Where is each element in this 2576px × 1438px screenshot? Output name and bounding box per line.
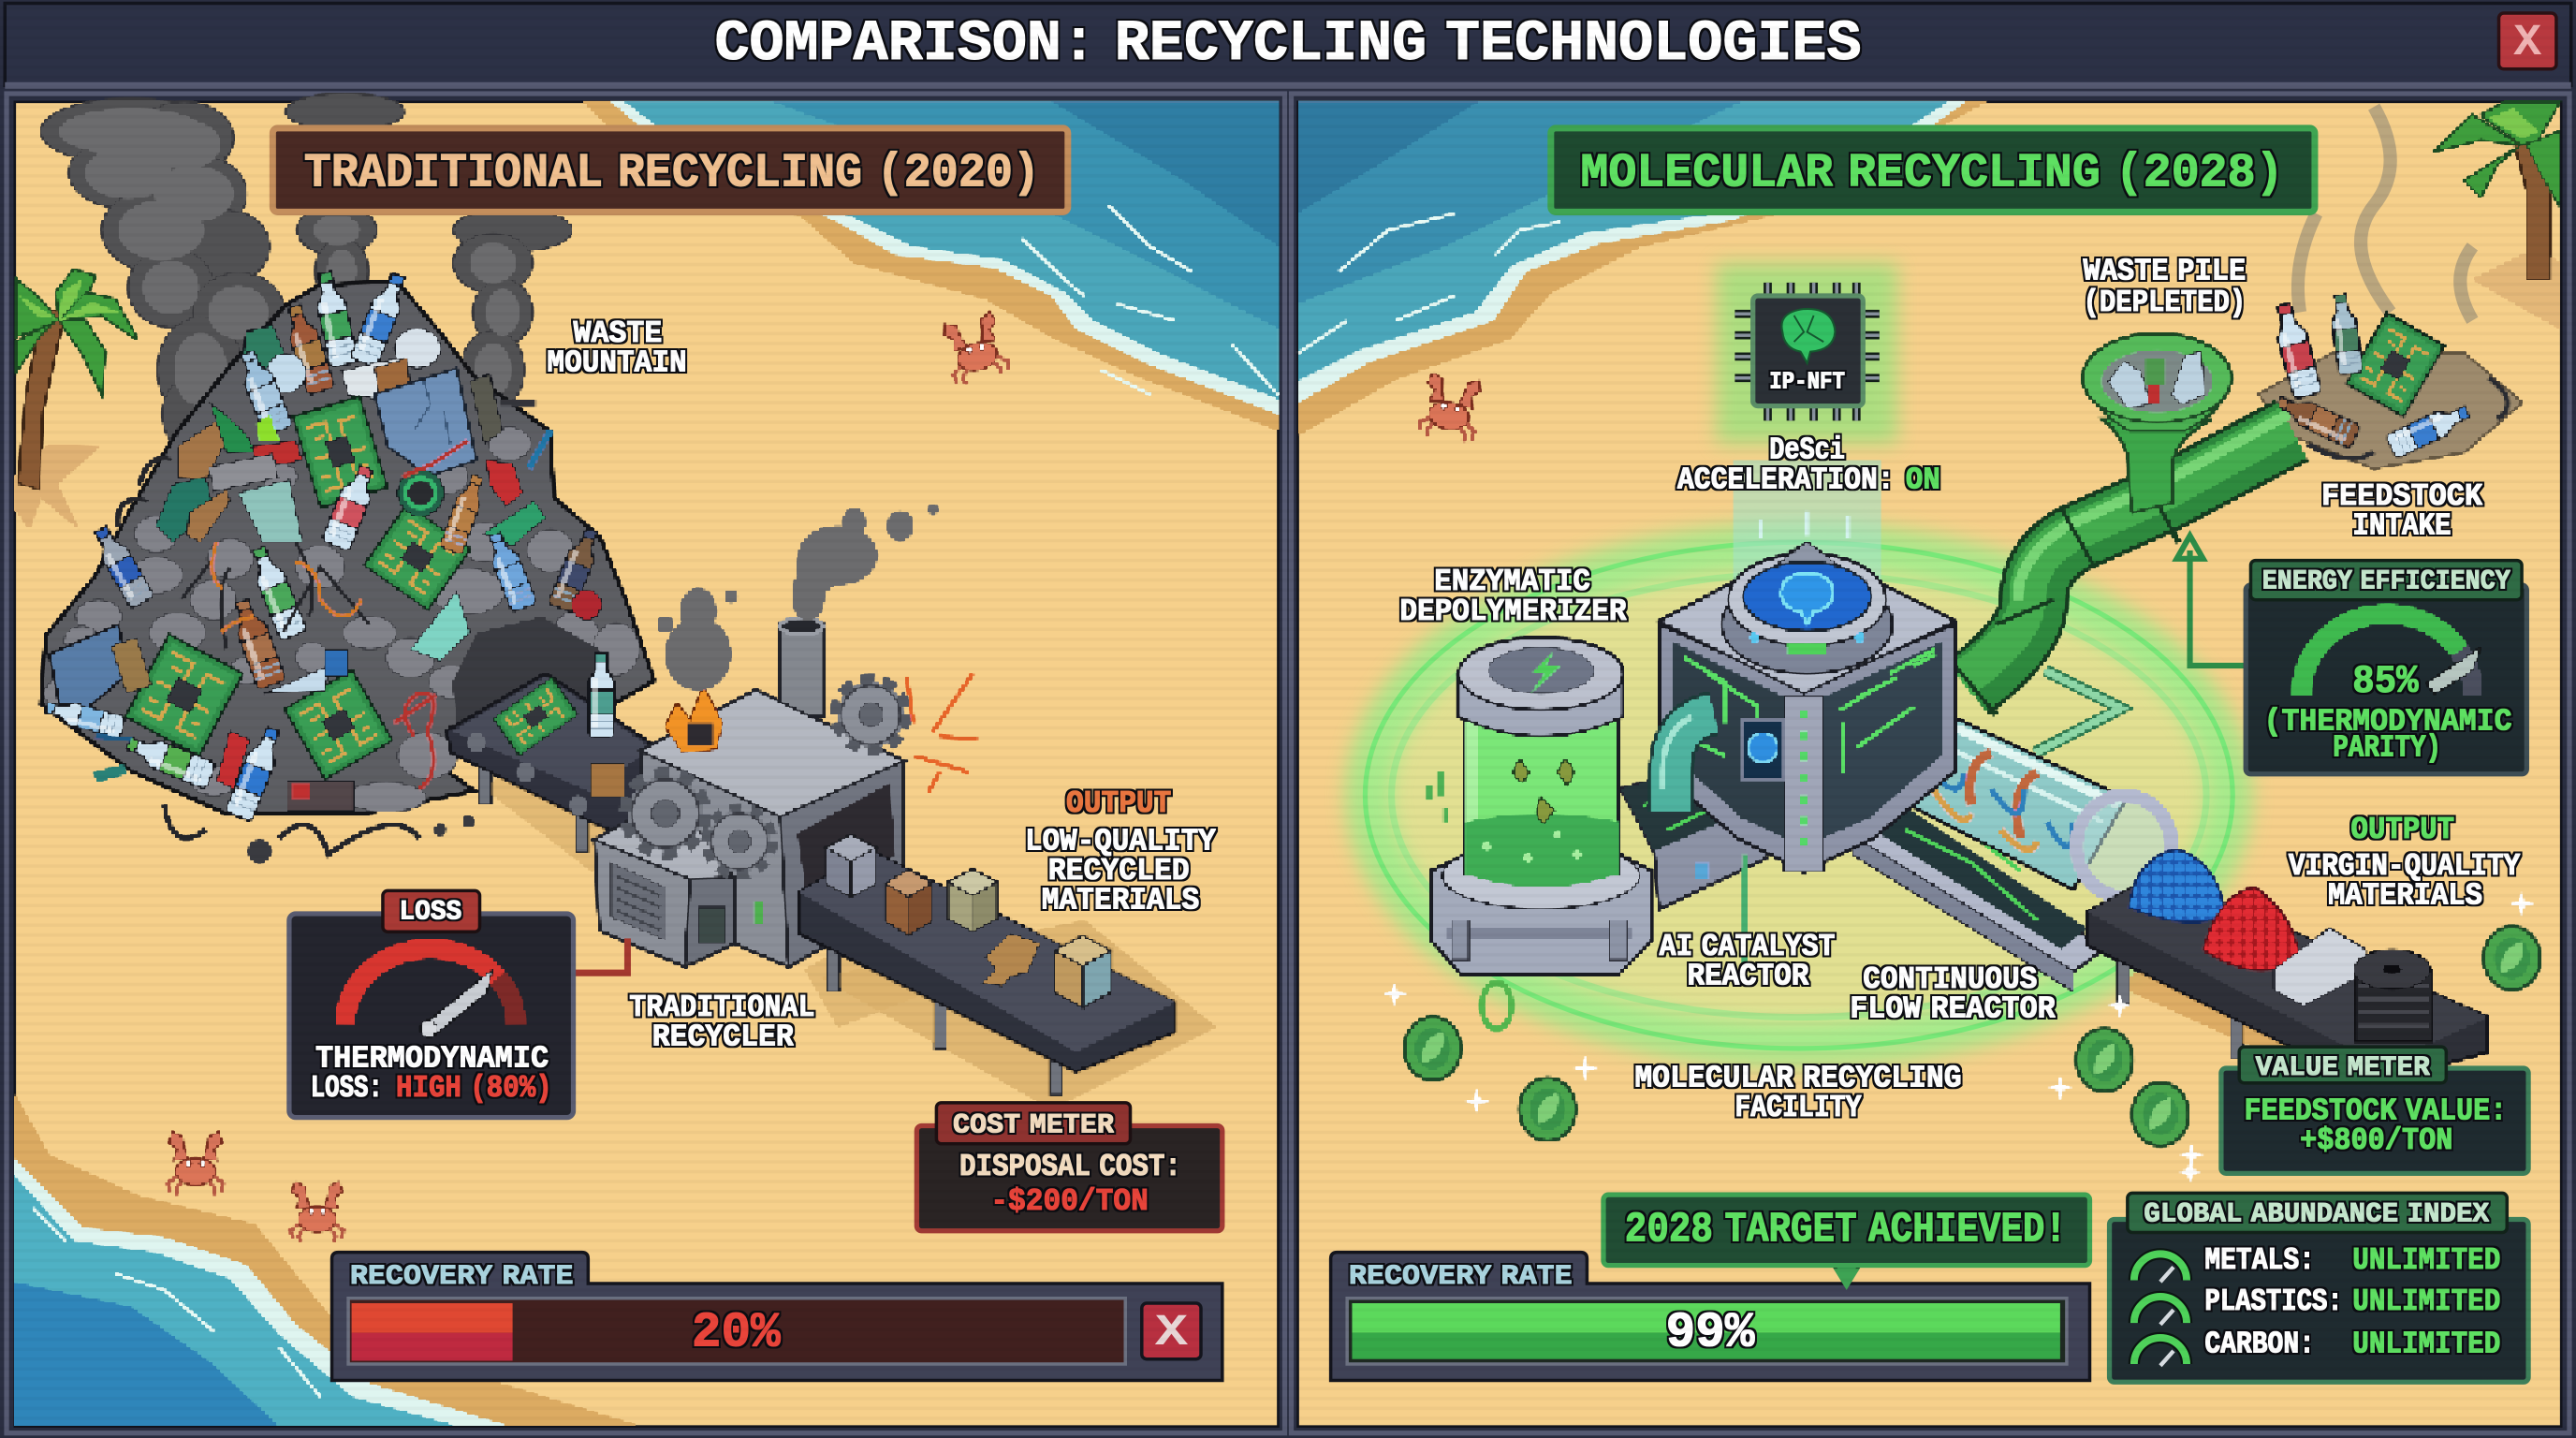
ocean top [583,102,1278,431]
label: waste pile depleted [2083,254,2246,321]
circuit boards [293,396,388,507]
loss meter panel: HIGH (80%) [396,1071,552,1107]
carbon row [2134,1328,2500,1366]
output conveyor with low-quality materials [800,835,1216,1109]
label: enzymatic depolymerizer [1399,565,1627,630]
energy gauge [2302,614,2481,696]
loss meter panel: LOSS: [311,1071,383,1107]
value: 20% [692,1305,781,1361]
label: molecular recycling facility: MOLECULAR RECYCLING [1634,1061,1962,1096]
target achieved banner: 2028 TARGET ACHIEVED! [1625,1205,2067,1254]
recovery rate label: RECOVERY RATE [350,1260,574,1292]
brown and green shards [178,420,227,480]
label: output virgin-quality: MATERIALS [2328,878,2482,914]
palm tree right [2435,102,2559,329]
green intake pipe and funnel [1955,333,2291,753]
coins and sparkles [1383,892,2541,1183]
value tab: VALUE METER [2256,1051,2430,1083]
faint smoke trails [2298,107,2472,320]
label: traditional recycler: TRADITIONAL [629,990,815,1026]
fire [666,687,723,753]
AI catalyst platform [1621,770,1766,970]
input conveyor [446,653,707,871]
label: traditional recycler: RECYCLER [652,1020,794,1055]
metals row: UNLIMITED [2352,1243,2500,1279]
traditional recycler machine [594,505,986,1027]
energy efficiency panel: PARITY) [2333,730,2441,766]
machine smoke [657,505,938,690]
wires [118,459,419,855]
target achieved banner [1603,1195,2089,1285]
value meter panel: +$800/TON [2300,1123,2452,1159]
heading: molecular recycling [1551,128,2315,212]
recovery rate label: RECOVERY RATE [1349,1260,1573,1292]
output conveyor with virgin-quality materials [2088,850,2487,1077]
energy efficiency panel [2246,561,2526,774]
global abundance index [2110,1193,2528,1382]
waste mountain [41,271,654,863]
label: molecular recycling facility [1634,1061,1962,1126]
value: 99% [1666,1305,1755,1361]
failed icon: X [1155,1309,1189,1358]
depleted waste pile [2259,294,2522,468]
label: desci acceleration [1677,433,1940,498]
title: COMPARISON: RECYCLING TECHNOLOGIES [714,12,1862,77]
label: output: MATERIALS [1042,884,1199,919]
label: output virgin-quality: OUTPUT [2351,813,2454,848]
label: continuous flow reactor [1850,962,2056,1028]
panel: molecular recycling [1292,94,2569,1433]
energy efficiency panel: (THERMODYNAMIC [2264,704,2512,740]
label: desci acceleration: DeSci [1769,433,1845,469]
label: waste mountain [547,316,687,382]
label: traditional recycler [629,990,815,1055]
AI catalyst reactor cube [1660,511,1955,871]
heading: traditional recycling [272,128,1068,212]
IP-NFT chip: IP-NFT [1769,367,1845,395]
label: feedstock intake [2321,479,2482,545]
fill 99% [1352,1303,2060,1359]
label: ai catalyst reactor: AI CATALYST [1660,930,1835,965]
cost meter panel: -$200/TON [990,1184,1149,1220]
smoke plumes [41,94,572,447]
label: ai catalyst reactor: REACTOR [1687,959,1808,994]
teal connecting tube [1662,713,1714,812]
label: output: LOW-QUALITY [1025,825,1216,860]
cost meter panel [916,1103,1222,1231]
ocean bottom [15,1094,640,1427]
energy efficiency panel: 85% [2352,659,2419,704]
ocean right [1298,102,1986,435]
label: desci acceleration: ACCELERATION: [1677,462,1895,498]
label: feedstock intake: INTAKE [2352,509,2452,545]
plastics row [2134,1284,2500,1325]
heading: traditional recycling: TRADITIONAL RECYCLING (2020) [304,147,1040,200]
label: waste pile depleted: (DEPLETED) [2083,286,2246,321]
label: waste mountain: WASTE [574,316,662,352]
label: enzymatic depolymerizer: DEPOLYMERIZER [1399,594,1627,630]
cost meter tab: COST METER [953,1108,1114,1140]
IP-NFT chip [1717,263,1897,608]
value meter panel [2221,1047,2528,1173]
crab [1417,372,1484,443]
connector pipe [574,938,627,973]
loss tab: LOSS [399,895,461,927]
heading: molecular recycling: MOLECULAR RECYCLING (2028) [1580,147,2284,200]
arrow to feedstock intake [2177,536,2244,666]
label: ai catalyst reactor [1660,930,1835,994]
enzymatic depolymerizer tank [1429,638,1651,975]
fill 20% [352,1303,513,1360]
value meter panel: FEEDSTOCK VALUE: [2244,1093,2507,1129]
palm tree left [15,270,138,529]
label: enzymatic depolymerizer: ENZYMATIC [1434,565,1590,600]
cost meter tab [936,1103,1131,1144]
loss tab [383,890,479,932]
label: feedstock intake: FEEDSTOCK [2321,479,2482,515]
top bottles [311,271,358,368]
molecular facility glow ring [1365,542,2232,1049]
label: desci acceleration: ON [1906,462,1940,498]
crabs [168,312,1010,1241]
mid bottles [322,462,380,551]
recovery rate bar 99% [1331,1253,2089,1381]
panel: traditional recycling [7,94,1284,1433]
label: output [1025,786,1216,919]
energy tab: ENERGY EFFICIENCY [2262,565,2510,596]
carbon row: UNLIMITED [2352,1328,2500,1363]
loss meter panel [289,890,574,1118]
loss meter panel: THERMODYNAMIC [315,1041,549,1077]
plastics row: PLASTICS: [2204,1284,2343,1320]
label: continuous flow reactor: CONTINUOUS [1863,962,2037,998]
failed icon [1142,1303,1201,1359]
label: molecular recycling facility: FACILITY [1734,1091,1862,1126]
metals row [2134,1243,2500,1282]
close button: X [2513,19,2542,68]
label: waste pile depleted: WASTE PILE [2083,254,2246,289]
label: output: OUTPUT [1066,786,1171,822]
label: waste mountain: MOUNTAIN [547,346,687,382]
plastics row: UNLIMITED [2352,1284,2500,1320]
loss gauge [345,948,516,1037]
carbon row: CARBON: [2204,1328,2315,1363]
blue device [374,368,476,477]
label: output virgin-quality: VIRGIN-QUALITY [2289,849,2520,885]
sparks [907,674,977,792]
index tab: GLOBAL ABUNDANCE INDEX [2144,1197,2489,1229]
cost meter panel: DISPOSAL COST: [959,1150,1181,1185]
recovery rate bar 20% [332,1253,1222,1381]
title bar [5,4,2571,89]
label: output virgin-quality [2289,813,2520,914]
label: output: RECYCLED [1048,854,1190,889]
metals row: METALS: [2204,1243,2315,1279]
close button [2499,13,2556,69]
continuous flow reactor [1853,692,2172,991]
label: continuous flow reactor: FLOW REACTOR [1850,992,2056,1028]
